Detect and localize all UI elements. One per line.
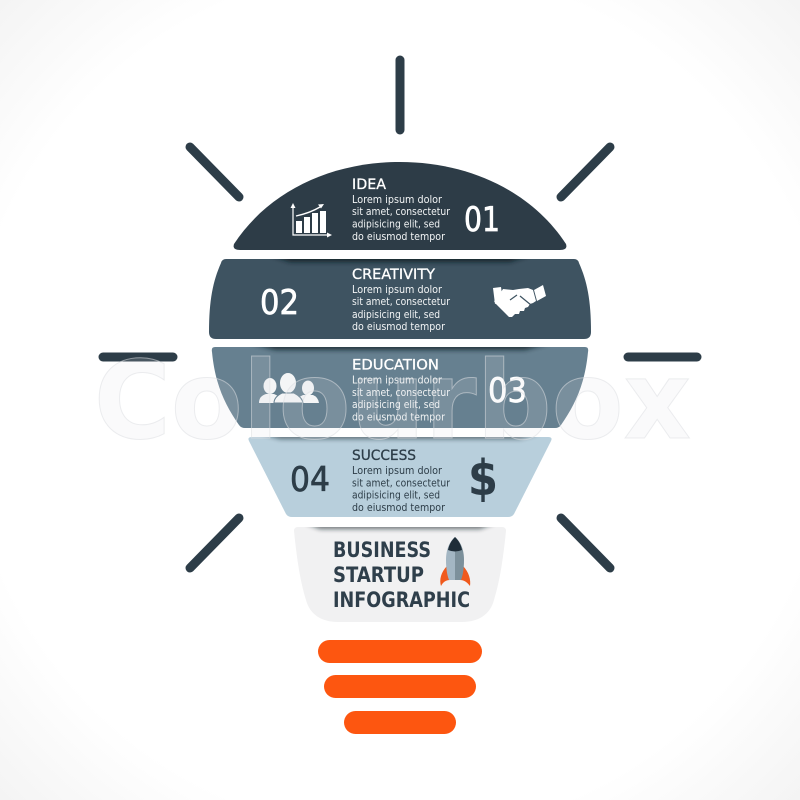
text block 01: sit amet, consectetur: [352, 205, 450, 218]
text block 04: do eiusmod tempor: [352, 501, 445, 514]
icon: dollar sign: $: [468, 450, 498, 507]
heading: success: SUCCESS: [352, 448, 416, 464]
text block 02: do eiusmod tempor: [352, 320, 445, 333]
text block 03: sit amet, consectetur: [352, 386, 450, 399]
text block 01: adipisicing elit, sed: [352, 218, 440, 230]
panel: 04 success: [248, 433, 552, 517]
icon: people: [259, 372, 319, 403]
shadow under segment 03: [264, 437, 536, 442]
text block 03: adipisicing elit, sed: [352, 398, 440, 411]
text block 01: do eiusmod tempor: [352, 230, 445, 243]
shadow under segment 01: [274, 259, 526, 265]
panel: 01 idea: [234, 162, 566, 250]
title text: INFOGRAPHIC: [333, 588, 470, 613]
shadow under segment 02: [250, 343, 550, 350]
watermark: Colourbox: [94, 339, 691, 464]
text block 01: Lorem ipsum dolor: [352, 193, 442, 206]
text block 04: adipisicing elit, sed: [352, 488, 440, 502]
text block 03: Lorem ipsum dolor: [352, 374, 442, 386]
icon: bar chart: [290, 203, 332, 238]
heading: creativity: CREATIVITY: [352, 267, 435, 283]
segment shape 04: [248, 437, 552, 517]
segment shape 03: [212, 347, 588, 428]
icon: rocket: [440, 537, 470, 586]
title text: [333, 538, 470, 613]
panel: business startup infographic: [294, 523, 506, 622]
segment shape 05: [294, 527, 506, 622]
text block 02: adipisicing elit, sed: [352, 308, 440, 321]
icon: handshake: [493, 285, 546, 317]
bulb base bars: [318, 640, 482, 734]
heading: education: EDUCATION: [352, 358, 439, 374]
text block 04: [352, 464, 450, 514]
text block 04: Lorem ipsum dolor: [352, 464, 442, 477]
heading: idea: IDEA: [352, 177, 386, 193]
text block 02: sit amet, consectetur: [352, 295, 450, 308]
panel: 02 creativity: [209, 255, 591, 339]
number 04: 04: [290, 460, 330, 500]
number 03: 03: [488, 371, 527, 411]
number 01: 01: [464, 200, 500, 240]
title text: BUSINESS: [333, 538, 431, 563]
text block 03: [352, 374, 450, 424]
segment shape 02: [209, 259, 591, 339]
title text: STARTUP: [333, 563, 424, 588]
text block 02: [352, 283, 450, 333]
segment shape 01: [234, 162, 566, 250]
text block 01: [352, 193, 450, 243]
light rays: [103, 60, 697, 568]
panel: 03 education: [212, 343, 588, 428]
number 02: 02: [260, 283, 299, 323]
text block 03: do eiusmod tempor: [352, 410, 445, 424]
text block 02: Lorem ipsum dolor: [352, 283, 442, 296]
shadow under segment 04: [307, 527, 493, 532]
text block 04: sit amet, consectetur: [352, 476, 450, 490]
